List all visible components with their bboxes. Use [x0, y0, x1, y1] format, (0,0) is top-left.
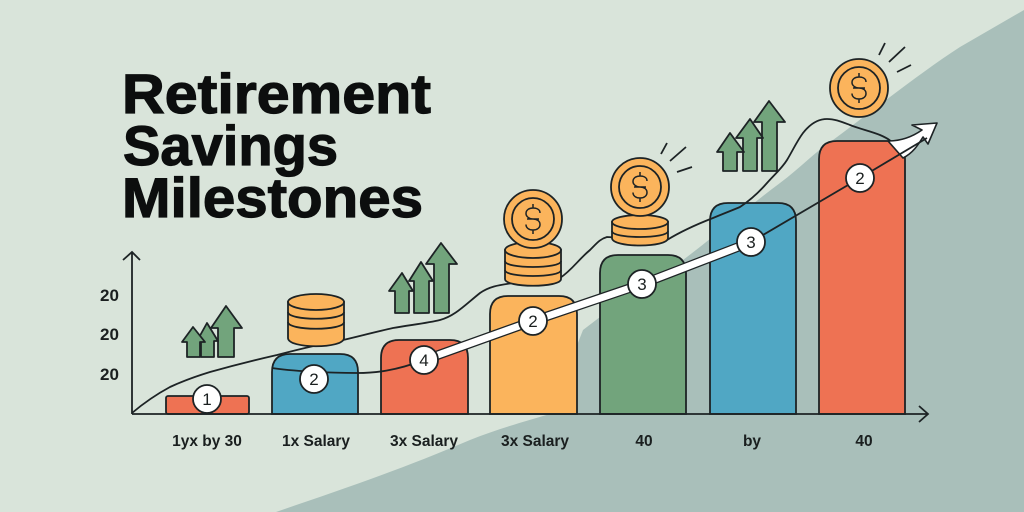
white ribbon trend line	[424, 242, 751, 360]
arrow head	[888, 123, 937, 158]
icon: growth arrows 1	[182, 306, 242, 357]
icon: coin stack with dollar coin 1	[504, 190, 562, 286]
bar 2	[272, 354, 358, 414]
marker numbers: 3	[746, 233, 756, 252]
x axis labels: by	[743, 433, 761, 450]
x axis labels: 3x Salary	[390, 433, 458, 450]
x axis labels: 40	[855, 433, 873, 450]
bar 5	[600, 255, 686, 414]
y axis labels: 20	[100, 365, 119, 384]
icon: coin stack 1	[288, 294, 344, 346]
bar 6	[710, 203, 796, 414]
title line 2: Savings	[123, 114, 338, 177]
icon: sparkle lines 1	[661, 143, 692, 172]
white ribbon fill	[424, 242, 751, 360]
marker numbers: 1	[202, 390, 212, 409]
title: Retirement	[122, 62, 431, 125]
thin growth curve	[132, 119, 897, 413]
x axis labels: 40	[635, 433, 653, 450]
x axis labels: 1yx by 30	[172, 433, 242, 450]
marker numbers: 4	[419, 351, 429, 370]
icon: growth arrows 3	[717, 101, 785, 171]
thin trend line	[751, 138, 927, 242]
marker numbers: 2	[855, 169, 865, 188]
marker numbers: 2	[309, 370, 319, 389]
y axis labels	[100, 286, 119, 384]
icon: dollar coin top	[830, 59, 888, 117]
icon: sparkle lines 2	[879, 43, 911, 72]
x axis labels	[172, 433, 873, 450]
bar 7	[819, 141, 905, 414]
milestone markers	[193, 164, 874, 413]
marker numbers	[202, 169, 865, 409]
y axis labels: 20	[100, 286, 119, 305]
y axis labels: 20	[100, 325, 119, 344]
bar 4	[490, 296, 577, 414]
marker numbers: 2	[528, 312, 538, 331]
title line 3: Milestones	[122, 166, 423, 229]
bar 1	[166, 396, 249, 414]
icon: coin stack with dollar coin 2	[611, 158, 669, 246]
background slope	[276, 10, 1024, 512]
axes	[123, 252, 928, 422]
x axis labels: 1x Salary	[282, 433, 350, 450]
bar 3	[381, 340, 468, 414]
x axis labels: 3x Salary	[501, 433, 569, 450]
marker numbers: 3	[637, 275, 647, 294]
second curve across bars	[272, 360, 424, 373]
icon: growth arrows 2	[389, 243, 457, 313]
